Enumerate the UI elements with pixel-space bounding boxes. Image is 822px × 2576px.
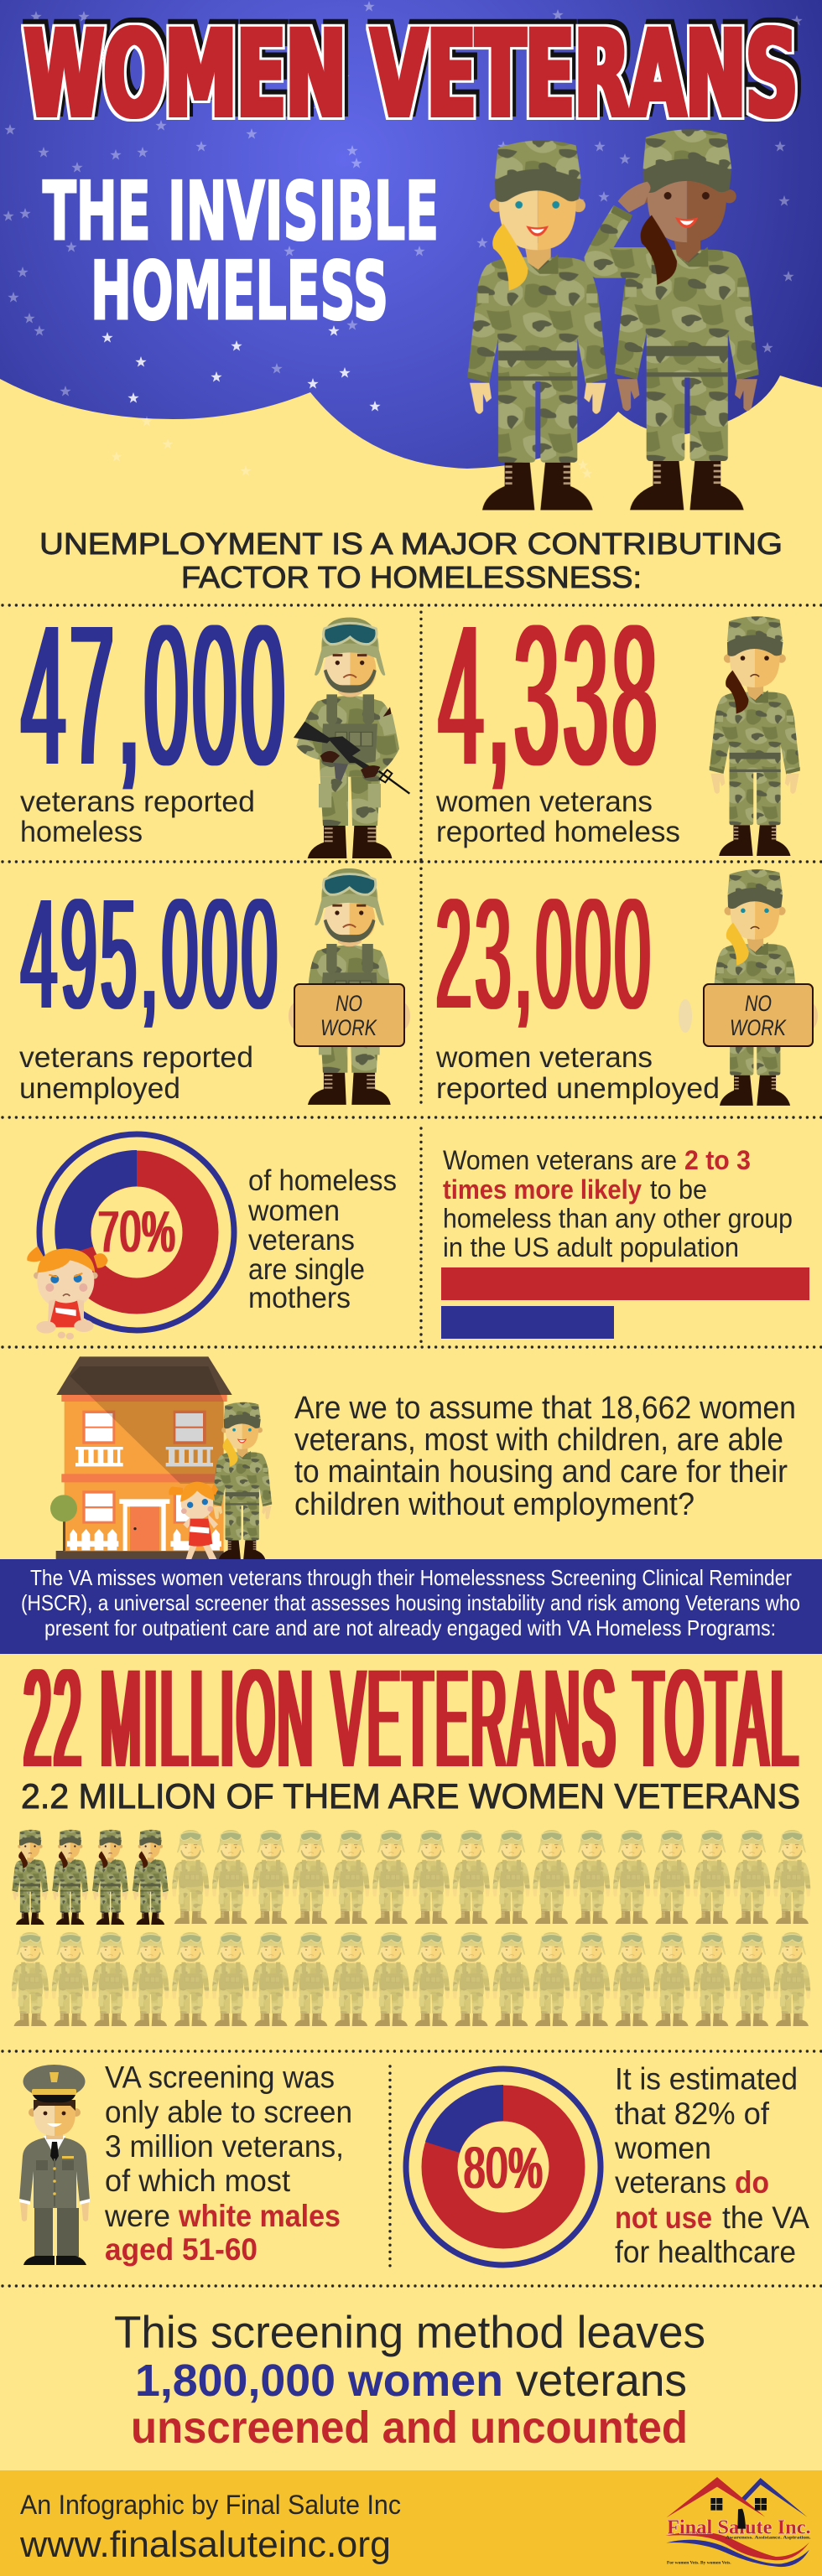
footer credit: An Infographic by Final Salute Inc	[20, 2490, 401, 2520]
dark-haired woman soldier saluting	[585, 129, 759, 510]
stat: 495,000 veterans unemployed: unemployed	[19, 1072, 180, 1105]
text: 82% do not use VA: veterans	[615, 2165, 726, 2200]
text: VA screening: were	[104, 2199, 170, 2233]
stat: 47,000 veterans homeless: homeless	[20, 816, 143, 848]
stat: 4,338 women veterans homeless	[435, 584, 680, 848]
subtitle	[43, 166, 439, 338]
pictogram: 4 of 40 veterans are women	[12, 1830, 810, 2026]
text: 495,000	[21, 868, 281, 1041]
text: 82% do not use VA: that 82% of	[615, 2097, 770, 2131]
sign: no work: NO	[745, 991, 772, 1016]
section heading: UNEMPLOYMENT IS A MAJOR CONTRIBUTING	[39, 526, 783, 561]
night sky banner with cloud edge	[0, 0, 822, 469]
text: single mothers: are single	[248, 1253, 365, 1286]
logo: Final Salute Inc: Awareness. Assistance. Aspiration.	[726, 2535, 812, 2540]
donut value: 70%	[98, 1199, 176, 1264]
footer url: www.finalsaluteinc.org	[19, 2524, 391, 2565]
text: 82% do not use VA: It is estimated	[615, 2062, 798, 2096]
text: VA screening	[104, 2060, 352, 2267]
stat: 23,000 women veterans unemployed	[435, 868, 720, 1105]
text: 2 to 3 times more likely: to be	[650, 1174, 707, 1205]
closing statement: 1,800,000 women	[135, 2356, 503, 2406]
text: 47,000	[22, 584, 289, 806]
sign: no work: NO	[336, 991, 362, 1016]
text: 82% do not use VA: women	[614, 2131, 711, 2165]
subheading: 2.2 million women veterans: 2.2 MILLION OF THEM ARE WOMEN VETERANS	[21, 1776, 800, 1816]
stat: 47,000 veterans homeless	[20, 584, 289, 848]
closing statement: veterans	[516, 2356, 687, 2406]
text: VA screening: white males	[178, 2199, 341, 2233]
text: 2 to 3 times more likely: homeless than any other group	[443, 1204, 793, 1234]
logo: Final Salute Inc: Final Salute Inc.	[667, 2517, 811, 2539]
text: single mothers: women	[247, 1195, 340, 1227]
illustration: two women soldiers saluting	[467, 129, 759, 510]
closing statement: This screening method leaves	[114, 2307, 705, 2357]
footer	[0, 2470, 822, 2576]
women veterans icons	[12, 1830, 169, 1925]
icon: officer in dress uniform	[19, 2065, 90, 2265]
stars	[3, 1, 803, 479]
icon: woman soldier sad	[710, 616, 800, 856]
logo: Final Salute Inc	[665, 2477, 812, 2567]
closing statement: unscreened and uncounted	[131, 2402, 688, 2453]
text: VA screening: aged 51-60	[105, 2232, 258, 2267]
question text: veterans, most with children, are able	[294, 1423, 783, 1458]
subtitle: HOMELESS	[91, 246, 388, 338]
text: 82% do not use VA: do	[735, 2165, 769, 2200]
child at house	[169, 1482, 218, 1561]
icon: sad baby girl	[27, 1247, 108, 1340]
sign: no work: WORK	[320, 1015, 377, 1040]
text: 2 to 3 times more likely	[443, 1145, 793, 1262]
text: single mothers: veterans	[248, 1224, 355, 1257]
question text: to maintain housing and care for their	[294, 1454, 788, 1490]
logo: Final Salute Inc: For women Vets. By women Vets.	[667, 2562, 731, 2566]
subtitle: THE INVISIBLE	[43, 166, 439, 258]
section heading: FACTOR TO HOMELESSNESS:	[181, 560, 642, 594]
text: single mothers: mothers	[248, 1282, 351, 1314]
stat: 47,000 veterans homeless: veterans reported	[20, 785, 255, 818]
text: VA screening: of which most	[105, 2164, 291, 2198]
blonde woman soldier	[467, 140, 607, 510]
section heading	[39, 526, 783, 594]
stat: 4,338 women veterans homeless: women veterans	[435, 785, 653, 818]
illustration: house with woman soldier and child	[50, 1356, 272, 1561]
donut chart: 70%	[39, 1134, 234, 1330]
icon: male soldier with no work sign	[289, 868, 410, 1105]
other veterans icons faded	[12, 1830, 810, 2026]
closing statement	[114, 2307, 705, 2453]
stat: 23,000 women veterans unemployed: women veterans	[435, 1041, 653, 1074]
text: 2 to 3 times more likely: times more likely	[443, 1174, 642, 1205]
blue info band	[0, 1559, 822, 1654]
stat: 23,000 women veterans unemployed: reported unemployed	[436, 1072, 720, 1105]
donut value: 80%	[464, 2135, 544, 2200]
icon: woman soldier with no work sign	[679, 869, 818, 1106]
sign: no work: WORK	[730, 1015, 787, 1040]
text: 2 to 3 times more likely: in the US adult population	[443, 1232, 739, 1262]
bar chart: likelihood comparison	[441, 1267, 809, 1339]
donut chart: 80%	[406, 2069, 601, 2265]
question text: Are we to assume that 18,662 women	[294, 1391, 796, 1426]
text: VA screening: only able to screen	[105, 2095, 352, 2129]
woman soldier at house	[212, 1402, 272, 1560]
text: VA screening: VA screening was	[105, 2060, 335, 2094]
text: single mothers: of homeless	[248, 1164, 397, 1197]
stat: 495,000 veterans unemployed: veterans reported	[19, 1041, 253, 1074]
stat: 495,000 veterans unemployed	[19, 868, 281, 1105]
icon: male soldier with rifle	[294, 618, 409, 858]
text: single mothers	[247, 1164, 397, 1314]
text: 82% do not use VA: the VA	[722, 2200, 809, 2235]
text: 2 to 3 times more likely: 2 to 3	[684, 1145, 751, 1175]
text: VA screening: 3 million veterans,	[105, 2129, 344, 2164]
sign: no work	[289, 984, 410, 1046]
question text: children without employment?	[294, 1487, 695, 1522]
stat: 4,338 women veterans homeless: reported homeless	[436, 816, 680, 848]
text: 2 to 3 times more likely: Women veterans are	[443, 1145, 677, 1175]
text: 82% do not use VA: for healthcare	[615, 2235, 796, 2269]
text: 82% do not use VA: not use	[615, 2200, 712, 2235]
text: 82% do not use VA	[614, 2062, 809, 2269]
question text	[294, 1391, 796, 1522]
sign: no work	[679, 984, 818, 1046]
